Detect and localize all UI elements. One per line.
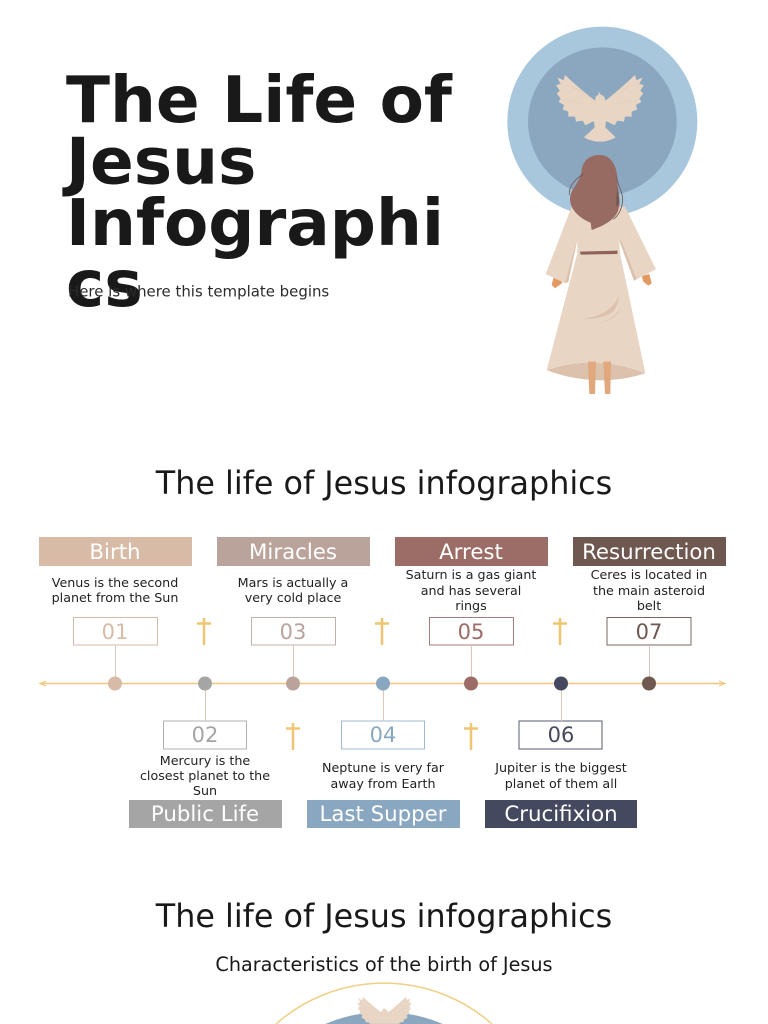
step 04: Last Supper: 04 (370, 723, 396, 747)
title: Jesus (62, 124, 256, 200)
step 02: Public Life: Public Life (151, 802, 259, 827)
step 07: Resurrection: belt (637, 598, 661, 613)
step 01: Birth: Birth (89, 540, 141, 565)
step 06: Crucifixion (485, 676, 637, 828)
step 04: Last Supper: Last Supper (319, 802, 447, 827)
step 05: Arrest: 05 (458, 620, 484, 644)
step 01: Birth (39, 537, 192, 690)
step 04: Last Supper (307, 676, 460, 828)
step 05: Arrest: and has several (421, 583, 521, 598)
step 03: Miracles: Miracles (249, 540, 337, 565)
step 02: Public Life (129, 676, 282, 828)
title: The Life of (66, 63, 453, 138)
step 06: Crucifixion: 06 (548, 723, 574, 747)
timeline axis (40, 681, 725, 686)
icons: crosses (197, 618, 567, 750)
step 04: Last Supper: Neptune is very far (322, 760, 445, 775)
step 01: Birth: planet from the Sun (52, 590, 178, 605)
step 07: Resurrection: 07 (636, 620, 662, 644)
step 05: Arrest (395, 537, 548, 690)
step 05: Arrest: Arrest (439, 540, 503, 565)
step 01: Birth: 01 (102, 620, 128, 644)
subtitle: Here is where this template begins (68, 282, 329, 300)
step 07: Resurrection: Resurrection (582, 540, 716, 565)
step 02: Public Life: Mercury is the (160, 753, 250, 768)
step 05: Arrest: Saturn is a gas giant (406, 567, 536, 582)
illustration: clipped halo and dove (276, 983, 492, 1024)
step 06: Crucifixion: planet of them all (505, 776, 617, 791)
step 03: Miracles: very cold place (245, 590, 341, 605)
step 01: Birth: Venus is the second (52, 575, 178, 590)
step 07: Resurrection: the main asteroid (593, 583, 705, 598)
step 07: Resurrection (573, 537, 726, 690)
step 02: Public Life: Sun (193, 783, 217, 798)
step 03: Miracles: 03 (280, 620, 306, 644)
title (62, 63, 453, 322)
step 03: Miracles (217, 537, 370, 690)
section heading 1: The life of Jesus infographics (155, 465, 612, 502)
step 07: Resurrection: Ceres is located in (591, 567, 707, 582)
title: cs (66, 247, 143, 322)
step 03: Miracles: Mars is actually a (238, 575, 348, 590)
step 06: Crucifixion: Jupiter is the biggest (494, 760, 627, 775)
title: Infographi (66, 186, 444, 261)
step 06: Crucifixion: Crucifixion (504, 802, 618, 827)
step 02: Public Life: 02 (192, 723, 218, 747)
step 04: Last Supper: away from Earth (330, 776, 436, 791)
section heading 2: The life of Jesus infographics (155, 898, 612, 935)
illustration: figure with halo and dove (507, 27, 697, 394)
step 02: Public Life: closest planet to the (140, 768, 270, 783)
section subheading: Characteristics of the birth of Jesus (215, 953, 553, 976)
step 05: Arrest: rings (455, 598, 487, 613)
